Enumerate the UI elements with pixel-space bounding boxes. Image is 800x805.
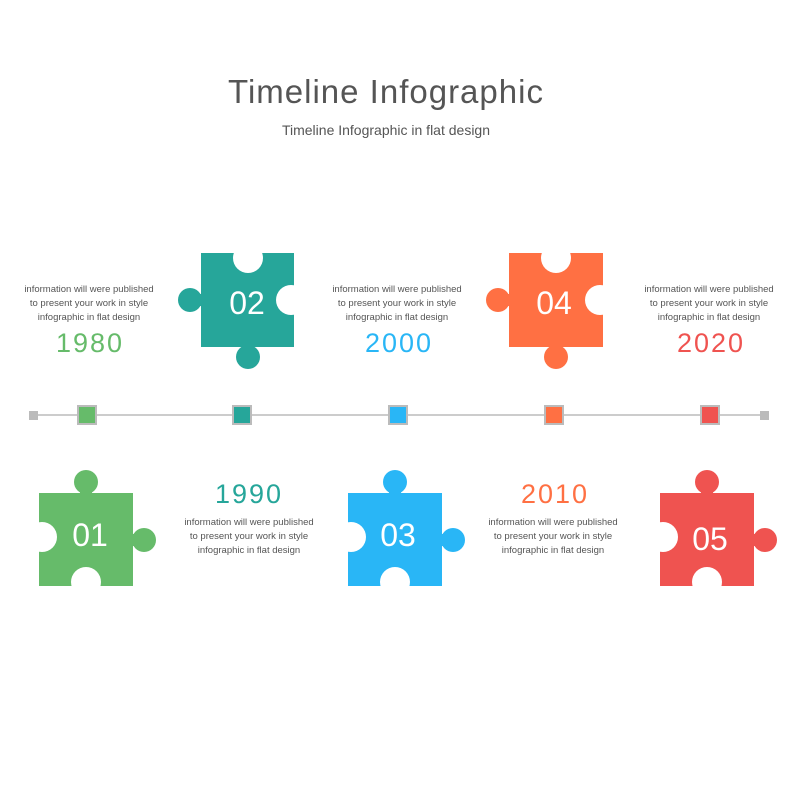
puzzle 03: 03: [380, 517, 416, 553]
text block 2000: information will were published: [332, 284, 462, 295]
text block 1990: infographic in flat design: [198, 545, 300, 556]
puzzle 02: [178, 243, 306, 369]
text block 2020: 2020: [677, 328, 745, 358]
title: Timeline Infographic: [228, 73, 544, 110]
text block 1980: 1980: [56, 328, 124, 358]
text block 2020: information will were published: [644, 284, 774, 295]
text block 2000: to present your work in style: [338, 298, 456, 309]
text block 2010: [488, 479, 618, 556]
puzzle 01: [27, 470, 156, 597]
text block 1980: to present your work in style: [30, 298, 148, 309]
puzzle 02: 02: [229, 285, 265, 321]
puzzle 05: [648, 470, 777, 597]
text block 1980: infographic in flat design: [38, 312, 140, 323]
text block 1990: [184, 479, 314, 556]
text block 1990: to present your work in style: [190, 531, 308, 542]
text block 2010: infographic in flat design: [502, 545, 604, 556]
text block 2020: infographic in flat design: [658, 312, 760, 323]
text block 1980: [24, 284, 154, 358]
puzzle 05: 05: [692, 521, 728, 557]
text block 1990: 1990: [215, 479, 283, 509]
text block 2010: information will were published: [488, 517, 618, 528]
text block 2010: 2010: [521, 479, 589, 509]
puzzle 01: 01: [72, 517, 108, 553]
timeline: [29, 406, 769, 424]
subtitle: Timeline Infographic in flat design: [282, 122, 490, 138]
text block 1990: information will were published: [184, 517, 314, 528]
text block 2020: [644, 284, 774, 358]
text block 2000: [332, 284, 462, 358]
text block 2000: infographic in flat design: [346, 312, 448, 323]
puzzle 04: [486, 243, 615, 369]
puzzle 04: 04: [536, 285, 572, 321]
text block 1980: information will were published: [24, 284, 154, 295]
text block 2020: to present your work in style: [650, 298, 768, 309]
puzzle 03: [336, 470, 465, 597]
text block 2000: 2000: [365, 328, 433, 358]
text block 2010: to present your work in style: [494, 531, 612, 542]
